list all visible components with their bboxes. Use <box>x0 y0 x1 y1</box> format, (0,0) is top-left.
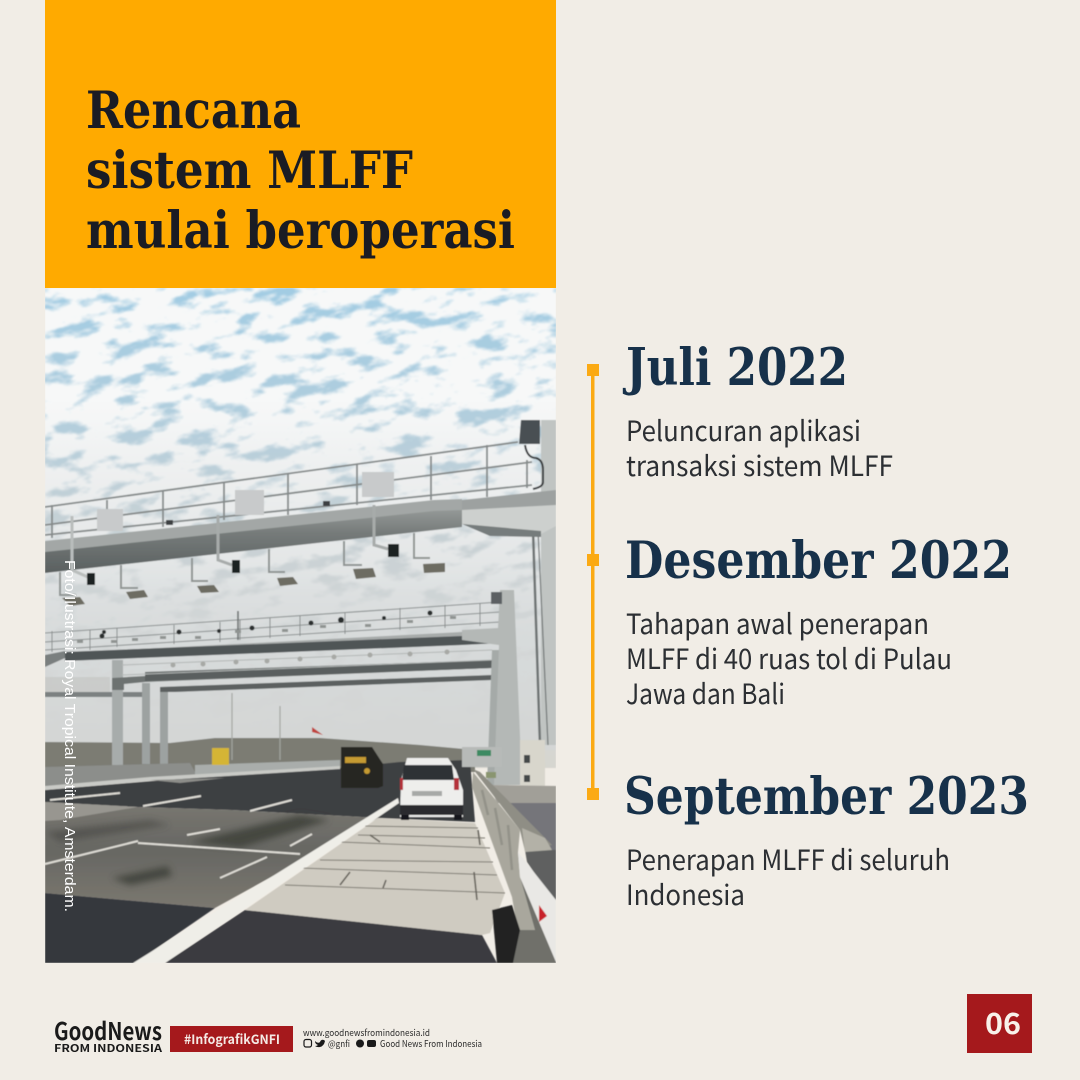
icon: twitter <box>315 1040 325 1047</box>
timeline item: Desember 2022: MLFF di 40 ruas tol di Pulau <box>626 638 952 678</box>
icon: youtube <box>367 1040 376 1047</box>
railings <box>45 442 532 538</box>
asphalt <box>45 760 475 822</box>
hashtag badge: #InfografikGNFI <box>184 1029 280 1048</box>
timeline line and markers <box>587 364 599 800</box>
timeline item: Desember 2022: Jawa dan Bali <box>626 673 785 713</box>
photo: toll gantries on a highway <box>45 288 556 963</box>
panel: title <box>45 0 556 288</box>
middle column <box>462 590 522 785</box>
footer contact text: Good News From Indonesia <box>380 1037 482 1050</box>
kerb <box>492 905 520 963</box>
road <box>45 727 556 963</box>
timeline item: Juli 2022: Juli 2022 <box>623 338 848 398</box>
white edge line <box>133 798 399 963</box>
right column <box>541 420 556 745</box>
far gantries <box>45 650 500 785</box>
concrete barrier <box>472 772 535 932</box>
panels on railing <box>97 509 123 531</box>
footer contact text: www.goodnewsfromindonesia.id <box>303 1026 430 1039</box>
heading: title text <box>86 81 515 261</box>
timeline item: September 2023: Indonesia <box>626 874 745 914</box>
page number <box>967 994 1032 1053</box>
footer logo: GoodNews From Indonesia: FROM INDONESIA <box>54 1041 162 1056</box>
middle gantry <box>45 590 522 785</box>
lamp <box>519 420 540 444</box>
heading: title text: Rencana <box>86 81 301 141</box>
white van <box>400 758 463 820</box>
concrete hard shoulder <box>245 818 505 935</box>
timeline item: Desember 2022: Desember 2022 <box>625 531 1012 591</box>
footer logo: GoodNews From Indonesia: GoodNews <box>54 1012 162 1047</box>
distant structures right <box>462 747 502 767</box>
hashtag badge <box>170 1026 293 1052</box>
timeline item: Juli 2022 <box>623 338 893 485</box>
timeline item: September 2023: September 2023 <box>624 767 1029 827</box>
near gantry <box>45 420 556 606</box>
footer logo: GoodNews From Indonesia <box>54 1012 162 1056</box>
left barrier <box>45 763 200 788</box>
timeline item: Desember 2022: Tahapan awal penerapan <box>626 603 929 643</box>
timeline item: September 2023 <box>624 767 1029 914</box>
icon: facebook <box>356 1040 364 1048</box>
yellow sign <box>212 748 229 765</box>
timeline item: Juli 2022: transaksi sistem MLFF <box>626 445 893 485</box>
heading: title text: sistem MLFF <box>86 141 413 201</box>
hills <box>45 738 475 772</box>
lower roadside <box>513 877 556 963</box>
icon: instagram <box>304 1040 312 1047</box>
timeline item: Desember 2022 <box>625 531 1012 713</box>
footer contact text <box>303 1026 482 1050</box>
page number: 06 <box>985 1001 1021 1043</box>
timeline item: September 2023: Penerapan MLFF di seluruh <box>626 839 950 879</box>
black van <box>341 747 383 788</box>
dark gap behind rail <box>525 850 556 905</box>
worn apron <box>45 802 378 908</box>
hanging brackets <box>60 505 430 595</box>
photo credit: Foto/Ilustrasi: Royal Tropical Institute, Amsterdam. <box>61 560 78 912</box>
heading: title text: mulai beroperasi <box>86 201 515 261</box>
red flag <box>312 727 323 735</box>
timeline item: Juli 2022: Peluncuran aplikasi <box>626 410 861 450</box>
footer contact text: @gnfi <box>328 1037 350 1050</box>
white guard rail <box>518 852 556 962</box>
